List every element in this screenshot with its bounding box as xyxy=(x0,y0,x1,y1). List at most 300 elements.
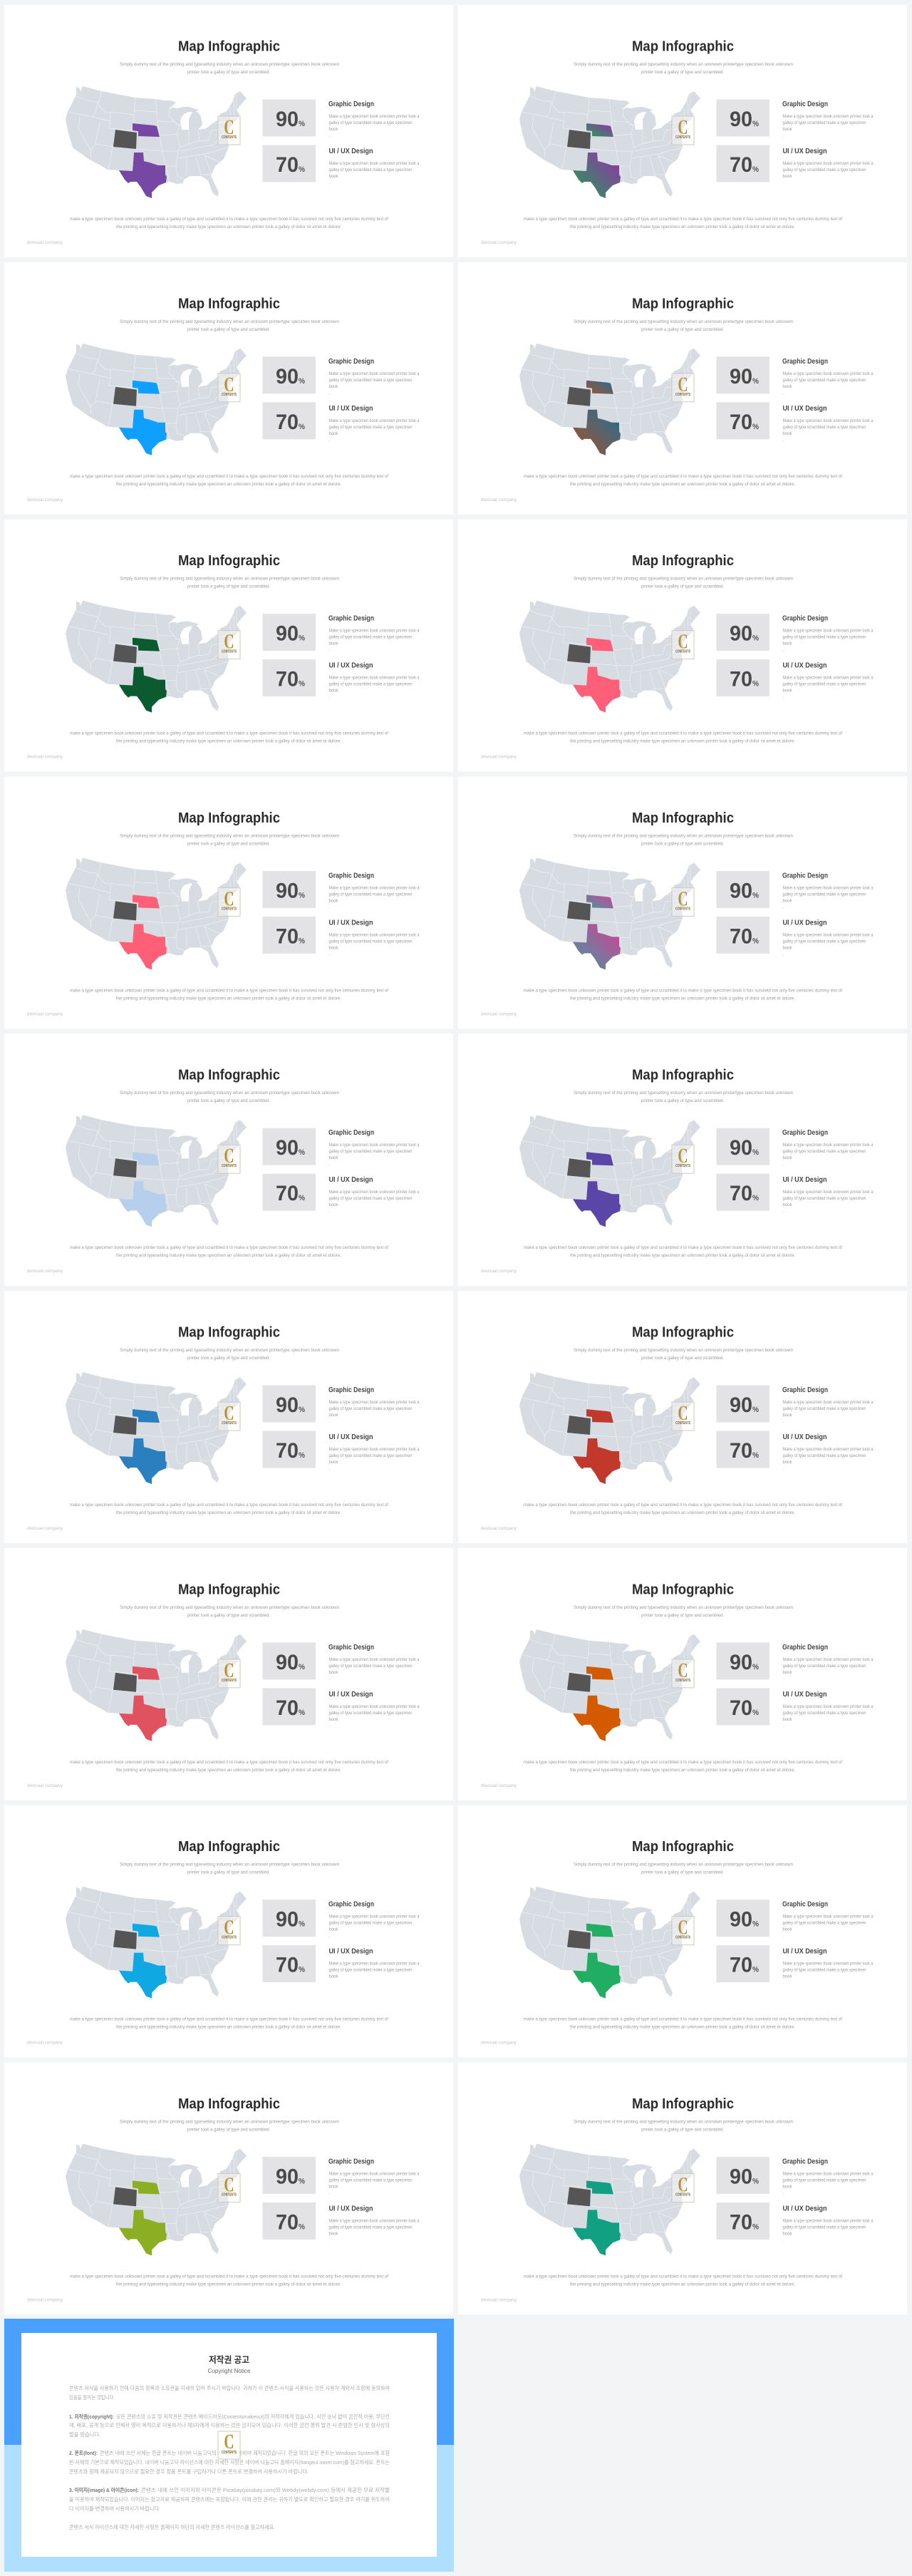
title: Map Infographic xyxy=(632,1068,734,1083)
item: UI / UX Design: galley of type scrambled make a type specimen xyxy=(782,1454,866,1458)
stat box 90%: 90 xyxy=(276,879,299,902)
logo watermark: C xyxy=(678,887,688,910)
stat box 90% xyxy=(717,1642,770,1679)
stat box 70%: 70 xyxy=(730,1696,752,1720)
item: Graphic Design: . xyxy=(329,134,331,138)
section 1 copyright: 1. 저작권(copyright): xyxy=(69,2413,114,2420)
logo watermark: C xyxy=(678,1401,688,1425)
item: Graphic Design: book xyxy=(329,1671,338,1675)
item: UI / UX Design: UI / UX Design xyxy=(329,1433,373,1441)
item: Graphic Design: galley of type scrambled make a type specimen xyxy=(782,2178,866,2183)
intro paragraph xyxy=(69,2384,390,2401)
company name: devisual company xyxy=(27,498,63,503)
logo watermark xyxy=(218,1916,240,1945)
stat box 70% xyxy=(262,145,316,182)
stat box 70%: 70 xyxy=(276,924,299,948)
subtitle text: printer took a galley of type and scrambled. xyxy=(187,842,270,846)
item: Graphic Design: Graphic Design xyxy=(782,100,828,108)
item: UI / UX Design: Make a type specimen book unknown printer took a xyxy=(782,1448,874,1452)
logo watermark xyxy=(672,630,694,659)
item: Graphic Design: Graphic Design xyxy=(782,357,828,366)
item: UI / UX Design: book xyxy=(782,689,792,694)
stat box 70% xyxy=(717,1431,770,1468)
stat box 90%: % xyxy=(752,120,759,128)
item: UI / UX Design: Make a type specimen book unknown printer took a xyxy=(782,2219,874,2223)
item: UI / UX Design: . xyxy=(782,696,784,700)
logo watermark: C xyxy=(678,1916,688,1939)
subtitle text xyxy=(574,1091,793,1103)
US map with highlighted states xyxy=(519,1887,700,1999)
logo watermark xyxy=(672,1401,694,1431)
subtitle text: printer took a galley of type and scrambled. xyxy=(187,328,270,332)
item: UI / UX Design xyxy=(782,404,874,443)
stat box 70%: % xyxy=(752,1709,759,1717)
panel: map slide 11 steel blue xyxy=(4,1291,453,1543)
stat box 70% xyxy=(717,1174,770,1211)
subtitle text: printer took a galley of type and scrambled. xyxy=(187,1356,270,1361)
item: Graphic Design xyxy=(782,1643,874,1681)
footer text: the printing and typesetting industry make type specimen an unknown printer took a galley of dolor sit amet et dolore. xyxy=(570,225,795,230)
section 2 font: 2. 폰트(font): xyxy=(69,2450,98,2456)
item: UI / UX Design: galley of type scrambled make a type specimen xyxy=(329,939,412,944)
stat box 90%: % xyxy=(752,2177,759,2185)
company name: devisual company xyxy=(481,1783,517,1788)
item: Graphic Design: book xyxy=(329,899,338,903)
stat box 70%: % xyxy=(752,2222,759,2231)
stat box 70%: 70 xyxy=(730,668,752,691)
item: UI / UX Design: . xyxy=(782,1982,784,1986)
subtitle text: Simply dummy text of the printing and typesetting industry when an unknown printertype specimen book unknown xyxy=(574,2120,793,2124)
stat box 70%: 70 xyxy=(276,2210,299,2234)
section 1 copyright: 모든 콘텐츠의 소유 및 저작권은 콘텐츠 메이드아웃(Contentsmakeout)의 저작자에게 있습니다. 사전 승낙 없이 금전적 이용, 무단전 xyxy=(116,2413,390,2420)
item: UI / UX Design: . xyxy=(329,2238,331,2242)
item: UI / UX Design: Make a type specimen book unknown printer took a xyxy=(329,419,420,423)
company name: devisual company xyxy=(27,1011,63,1016)
item: Graphic Design xyxy=(782,871,874,910)
subtitle text: Simply dummy text of the printing and typesetting industry when an unknown printertype specimen book unknown xyxy=(574,63,793,67)
footer text: the printing and typesetting industry make type specimen an unknown printer took a galley of dolor sit amet et dolore. xyxy=(116,996,341,1001)
item: Graphic Design: . xyxy=(782,905,784,910)
stat box 70% xyxy=(717,659,770,696)
panel: map slide 17 olive xyxy=(4,2062,453,2314)
item: Graphic Design xyxy=(328,100,420,138)
item: Graphic Design: Make a type specimen book unknown printer took a xyxy=(782,115,874,119)
item: UI / UX Design: Make a type specimen book unknown printer took a xyxy=(329,1705,420,1709)
stat box 90%: % xyxy=(299,377,305,386)
stat box 90% xyxy=(262,2157,316,2194)
item: UI / UX Design: Make a type specimen book unknown printer took a xyxy=(782,933,874,937)
item: UI / UX Design: UI / UX Design xyxy=(329,661,373,670)
item: UI / UX Design: galley of type scrambled make a type specimen xyxy=(782,168,866,172)
item: UI / UX Design: . xyxy=(329,1210,331,1214)
item: Graphic Design: Graphic Design xyxy=(782,1128,828,1137)
item: Graphic Design: Graphic Design xyxy=(782,1643,828,1652)
item: UI / UX Design: . xyxy=(782,952,784,957)
panel: map slide 15 cyan xyxy=(4,1805,453,2058)
stat box 70% xyxy=(717,917,770,954)
section 2 font: 된 서체의 기본으로 제작되었습니다. 네이버 나눔고딕 라이선스에 대한 자세한 사항은 네이버 나눔고딕 홈페이지(hangeul.naver.com)를 참고하세요. 폰트는 xyxy=(69,2458,390,2466)
logo watermark: C xyxy=(224,2430,234,2453)
stat box 70%: 70 xyxy=(276,1182,299,1205)
stat box 90% xyxy=(717,1900,770,1937)
stat box 90%: % xyxy=(752,1148,759,1157)
subtitle text: Simply dummy text of the printing and typesetting industry when an unknown printertype specimen book unknown xyxy=(120,1091,339,1096)
stat box 70% xyxy=(262,1174,316,1211)
item: Graphic Design: Graphic Design xyxy=(328,2157,374,2165)
footer text xyxy=(524,1503,842,1515)
stat box 90% xyxy=(717,2157,770,2194)
panel: map slide 7 coral pink xyxy=(4,776,453,1029)
stat box 70%: 70 xyxy=(276,1439,299,1463)
subtitle text xyxy=(574,1863,793,1875)
item: UI / UX Design xyxy=(329,404,420,443)
footer text: the printing and typesetting industry make type specimen an unknown printer took a galley of dolor sit amet et dolore. xyxy=(570,996,795,1001)
stat box 90%: % xyxy=(299,120,305,128)
item: UI / UX Design: Make a type specimen book unknown printer took a xyxy=(782,419,874,423)
footer text xyxy=(524,1761,842,1773)
section 2 font: 콘텐츠와 함께 제공되지 않으므로 필요한 경우 정품 폰트를 구입하거나 다른 폰트로 변경하여 사용하시기 바랍니다. xyxy=(69,2468,309,2475)
title: Map Infographic xyxy=(632,810,734,826)
item: Graphic Design: . xyxy=(782,1934,784,1939)
item: UI / UX Design: UI / UX Design xyxy=(329,1947,373,1956)
subtitle text xyxy=(574,2120,793,2132)
item: Graphic Design: galley of type scrambled make a type specimen xyxy=(329,1407,412,1411)
company name: devisual company xyxy=(27,755,63,760)
stat box 90% xyxy=(262,871,316,908)
footer text: the printing and typesetting industry make type specimen an unknown printer took a galley of dolor sit amet et dolore. xyxy=(570,1768,795,1773)
company name: devisual company xyxy=(27,1526,63,1531)
company name: devisual company xyxy=(481,240,517,245)
title: Map Infographic xyxy=(632,1324,734,1340)
footer text xyxy=(70,475,388,487)
item: UI / UX Design: book xyxy=(782,175,792,179)
copyright heading: 저작권 공고 xyxy=(209,2354,249,2365)
item: UI / UX Design xyxy=(329,1947,420,1986)
logo watermark: C xyxy=(224,1916,234,1939)
logo watermark xyxy=(218,373,240,402)
item: UI / UX Design: UI / UX Design xyxy=(329,1690,373,1699)
item: UI / UX Design: book xyxy=(782,1203,792,1207)
panel: map slide 14 orange xyxy=(458,1548,907,1800)
stat box 90% xyxy=(262,356,316,393)
subtitle text: Simply dummy text of the printing and typesetting industry when an unknown printertype specimen book unknown xyxy=(574,320,793,324)
logo watermark: C xyxy=(224,1401,234,1425)
stat box 90%: 90 xyxy=(730,879,752,902)
item: UI / UX Design: UI / UX Design xyxy=(782,1433,826,1441)
subtitle text: Simply dummy text of the printing and typesetting industry when an unknown printertype specimen book unknown xyxy=(120,1349,339,1353)
item: UI / UX Design: . xyxy=(329,1467,331,1471)
footer text: the printing and typesetting industry make type specimen an unknown printer took a galley of dolor sit amet et dolore. xyxy=(570,1254,795,1258)
stat box 70%: 70 xyxy=(730,1954,752,1977)
footer text: the printing and typesetting industry make type specimen an unknown printer took a galley of dolor sit amet et dolore. xyxy=(570,2282,795,2287)
item: Graphic Design: galley of type scrambled make a type specimen xyxy=(329,1664,412,1669)
logo watermark xyxy=(218,1659,240,1688)
item: Graphic Design: . xyxy=(782,1420,784,1424)
subtitle text: Simply dummy text of the printing and typesetting industry when an unknown printertype specimen book unknown xyxy=(120,1606,339,1610)
US map with highlighted states xyxy=(519,857,700,969)
US map with highlighted states xyxy=(66,1372,247,1484)
item: UI / UX Design: galley of type scrambled make a type specimen xyxy=(329,426,412,430)
stat box 70%: 70 xyxy=(276,1954,299,1977)
item: UI / UX Design: book xyxy=(329,432,338,436)
subtitle text: printer took a galley of type and scrambled. xyxy=(641,328,724,332)
item: UI / UX Design: book xyxy=(782,1718,792,1722)
subtitle text: Simply dummy text of the printing and typesetting industry when an unknown printertype specimen book unknown xyxy=(120,320,339,324)
stat box 90%: % xyxy=(752,1406,759,1414)
section 3 image and icon: 을 이용하여 제작되었습니다. 이미지는 참고자료 제공하며 콘텐츠에는 포함됩니다. 이에 관한 권리는 귀하가 별도로 확인하고 필요한 경우 여기를 위두하여 xyxy=(69,2495,390,2503)
stat box 90%: 90 xyxy=(276,2165,299,2188)
item: Graphic Design: galley of type scrambled make a type specimen xyxy=(329,636,412,640)
logo watermark xyxy=(218,2173,240,2202)
subtitle text xyxy=(574,320,793,332)
stat box 70%: % xyxy=(299,680,305,689)
stat box 70% xyxy=(717,1945,770,1982)
item: UI / UX Design: galley of type scrambled make a type specimen xyxy=(329,2225,412,2230)
item: UI / UX Design xyxy=(329,918,420,957)
stat box 70%: % xyxy=(752,680,759,689)
section 2 font xyxy=(69,2449,390,2475)
item: UI / UX Design: galley of type scrambled make a type specimen xyxy=(782,1969,866,1973)
logo watermark: CONTENTS xyxy=(222,2193,237,2197)
stat box 70%: % xyxy=(299,1451,305,1460)
panel: map slide 13 rose red xyxy=(4,1548,453,1800)
item: UI / UX Design: book xyxy=(329,946,338,950)
subtitle text: printer took a galley of type and scrambled. xyxy=(641,585,724,589)
item: Graphic Design xyxy=(782,1900,874,1939)
item: UI / UX Design: Make a type specimen book unknown printer took a xyxy=(782,1705,874,1709)
company name: devisual company xyxy=(27,2297,63,2302)
item: UI / UX Design: galley of type scrambled make a type specimen xyxy=(782,683,866,687)
item: UI / UX Design: galley of type scrambled make a type specimen xyxy=(329,1197,412,1201)
company name: devisual company xyxy=(481,2041,517,2046)
item: Graphic Design xyxy=(782,1386,874,1424)
logo watermark xyxy=(672,1916,694,1945)
panel: map slide 2 purple-green gradient xyxy=(458,5,907,257)
item: UI / UX Design: UI / UX Design xyxy=(329,2204,373,2212)
logo watermark: CONTENTS xyxy=(222,1679,237,1683)
footer text xyxy=(70,1503,388,1515)
item: UI / UX Design: Make a type specimen book unknown printer took a xyxy=(329,1190,420,1195)
stat box 70%: 70 xyxy=(730,2210,752,2234)
item: UI / UX Design: Make a type specimen book unknown printer took a xyxy=(782,1962,874,1967)
item: Graphic Design: book xyxy=(782,1928,792,1932)
item: UI / UX Design: UI / UX Design xyxy=(782,147,826,155)
logo watermark: C xyxy=(224,1659,234,1682)
logo watermark xyxy=(672,2173,694,2202)
item: Graphic Design: . xyxy=(782,649,784,653)
US map with highlighted states xyxy=(66,1629,247,1741)
item: Graphic Design: galley of type scrambled make a type specimen xyxy=(329,121,412,125)
subtitle text: printer took a galley of type and scrambled. xyxy=(187,71,270,75)
footer text xyxy=(70,217,388,230)
item: Graphic Design: galley of type scrambled make a type specimen xyxy=(782,1150,866,1154)
company name: devisual company xyxy=(481,755,517,760)
footer text: the printing and typesetting industry make type specimen an unknown printer took a galley of dolor sit amet et dolore. xyxy=(116,225,341,230)
subtitle text: Simply dummy text of the printing and typesetting industry when an unknown printertype specimen book unknown xyxy=(574,577,793,582)
logo watermark: C xyxy=(224,115,234,139)
title: Map Infographic xyxy=(632,2096,734,2112)
title: Map Infographic xyxy=(178,1324,280,1340)
section 3 image and icon: 다 이미지를 변경하여 사용하시기 바랍니다. xyxy=(69,2505,160,2512)
company name: devisual company xyxy=(481,1526,517,1531)
subtitle text: Simply dummy text of the printing and typesetting industry when an unknown printertype specimen book unknown xyxy=(120,2120,339,2124)
item: Graphic Design: galley of type scrambled make a type specimen xyxy=(782,1664,866,1669)
footer text: make a type specimen book unknown printer took a galley of type and scrambled it to make a type specimen book it has survived not only five centuries dummy text of xyxy=(524,2274,842,2279)
US map with highlighted states xyxy=(66,601,247,713)
panel: map slide 3 blue xyxy=(4,262,453,515)
stat box 90%: % xyxy=(752,891,759,900)
item: Graphic Design: galley of type scrambled make a type specimen xyxy=(782,636,866,640)
stat box 70%: 70 xyxy=(730,1182,752,1205)
stat box 90%: 90 xyxy=(730,365,752,388)
item: Graphic Design xyxy=(328,1386,420,1424)
item: Graphic Design: Graphic Design xyxy=(328,100,374,108)
stat box 90%: % xyxy=(752,377,759,386)
item: UI / UX Design xyxy=(329,147,420,185)
subtitle text xyxy=(120,1091,339,1103)
logo watermark: CONTENTS xyxy=(222,2451,237,2455)
item: Graphic Design: book xyxy=(329,128,338,132)
stat box 70%: % xyxy=(299,937,305,945)
stat box 90% xyxy=(717,100,770,137)
stat box 90% xyxy=(262,1642,316,1679)
closing line: 콘텐츠 서식 라이선스에 대한 자세한 사항은 홈페이지 하단의 자세한 콘텐츠 라이선스를 참고하세요. xyxy=(69,2523,275,2530)
item: UI / UX Design xyxy=(329,1433,420,1471)
footer text: make a type specimen book unknown printer took a galley of type and scrambled it to make a type specimen book it has survived not only five centuries dummy text of xyxy=(70,2018,388,2022)
panel: map slide 1 purple xyxy=(4,5,453,257)
item: Graphic Design: galley of type scrambled make a type specimen xyxy=(782,1407,866,1411)
item: UI / UX Design: UI / UX Design xyxy=(329,404,373,413)
subtitle text: Simply dummy text of the printing and typesetting industry when an unknown printertype specimen book unknown xyxy=(574,1091,793,1096)
item: UI / UX Design: galley of type scrambled make a type specimen xyxy=(329,683,412,687)
US map with highlighted states xyxy=(519,1372,700,1484)
subtitle text: printer took a galley of type and scrambled. xyxy=(641,842,724,846)
subtitle text: printer took a galley of type and scrambled. xyxy=(641,1099,724,1103)
item: Graphic Design: book xyxy=(329,642,338,646)
item: Graphic Design: Graphic Design xyxy=(782,2157,828,2165)
company name: devisual company xyxy=(481,1011,517,1016)
item: Graphic Design: Make a type specimen book unknown printer took a xyxy=(782,1401,874,1405)
subtitle text: printer took a galley of type and scrambled. xyxy=(187,1871,270,1875)
footer text xyxy=(524,732,842,744)
title: Map Infographic xyxy=(632,553,734,569)
company name: devisual company xyxy=(27,2041,63,2046)
title: Map Infographic xyxy=(632,1582,734,1597)
logo watermark xyxy=(218,1401,240,1431)
subtitle text: Simply dummy text of the printing and typesetting industry when an unknown printertype specimen book unknown xyxy=(120,577,339,582)
item: Graphic Design: Make a type specimen book unknown printer took a xyxy=(329,2172,420,2176)
title: Map Infographic xyxy=(178,1582,280,1597)
logo watermark xyxy=(672,1659,694,1688)
logo watermark xyxy=(672,115,694,145)
item: Graphic Design: book xyxy=(329,1156,338,1160)
company name: devisual company xyxy=(481,498,517,503)
section 3 image and icon: 콘텐츠 내에 쓰인 이미지와 아이콘은 Pixabay(pixabay.com)와 Webdy(webdy.com) 등에서 제공한 무료 저작물 xyxy=(141,2486,390,2493)
logo watermark: CONTENTS xyxy=(675,1164,691,1168)
item: Graphic Design: Make a type specimen book unknown printer took a xyxy=(329,1915,420,1920)
item: UI / UX Design: galley of type scrambled make a type specimen xyxy=(782,1197,866,1201)
item: Graphic Design: galley of type scrambled make a type specimen xyxy=(782,378,866,383)
stat box 70%: 70 xyxy=(276,668,299,691)
item: Graphic Design xyxy=(782,357,874,396)
item: Graphic Design: . xyxy=(782,1163,784,1167)
US map with highlighted states xyxy=(66,344,247,455)
footer text xyxy=(524,475,842,487)
item: Graphic Design: galley of type scrambled make a type specimen xyxy=(329,892,412,897)
item: UI / UX Design: book xyxy=(329,175,338,179)
section 3 image and icon: 3. 이미지(image) & 아이콘(icon): xyxy=(69,2486,139,2493)
subtitle text xyxy=(574,63,793,75)
section 3 image and icon xyxy=(69,2486,390,2512)
stat box 70%: % xyxy=(299,423,305,431)
panel: map slide 12 brick red xyxy=(458,1291,907,1543)
subtitle text: printer took a galley of type and scrambled. xyxy=(641,1871,724,1875)
stat box 90%: % xyxy=(299,2177,305,2185)
item: Graphic Design: Make a type specimen book unknown printer took a xyxy=(329,886,420,890)
stat box 90%: 90 xyxy=(730,1136,752,1160)
subtitle text xyxy=(120,2120,339,2132)
footer text: make a type specimen book unknown printer took a galley of type and scrambled it to make a type specimen book it has survived not only five centuries dummy text of xyxy=(70,732,388,736)
item: UI / UX Design: . xyxy=(329,438,331,443)
footer text: make a type specimen book unknown printer took a galley of type and scrambled it to make a type specimen book it has survived not only five centuries dummy text of xyxy=(70,989,388,993)
stat box 90%: % xyxy=(299,1148,305,1157)
subtitle text xyxy=(120,1349,339,1361)
item: UI / UX Design: . xyxy=(329,696,331,700)
item: Graphic Design xyxy=(328,1900,420,1939)
logo watermark: CONTENTS xyxy=(222,650,237,654)
item: UI / UX Design: Make a type specimen book unknown printer took a xyxy=(329,1448,420,1452)
item: Graphic Design: book xyxy=(782,1156,792,1160)
logo watermark: CONTENTS xyxy=(675,907,691,911)
stat box 70%: % xyxy=(752,1966,759,1974)
item: UI / UX Design: book xyxy=(782,432,792,436)
stat box 90%: 90 xyxy=(730,1908,752,1932)
stat box 70% xyxy=(262,1431,316,1468)
item: Graphic Design xyxy=(328,614,420,653)
logo watermark: C xyxy=(678,1659,688,1682)
item: UI / UX Design: . xyxy=(329,181,331,185)
copyright subheading: Copyright Notice xyxy=(208,2368,251,2374)
subtitle text xyxy=(120,1606,339,1618)
title: Map Infographic xyxy=(632,38,734,54)
logo watermark: C xyxy=(224,373,234,396)
logo watermark: CONTENTS xyxy=(222,1936,237,1940)
item: UI / UX Design: book xyxy=(329,1975,338,1979)
item: Graphic Design xyxy=(328,357,420,396)
item: UI / UX Design: galley of type scrambled make a type specimen xyxy=(329,1454,412,1458)
title: Map Infographic xyxy=(178,1068,280,1083)
subtitle text: printer took a galley of type and scrambled. xyxy=(641,71,724,75)
panel: map slide 10 indigo xyxy=(458,1034,907,1286)
item: UI / UX Design xyxy=(782,1947,874,1986)
panel: map slide 18 teal xyxy=(458,2062,907,2314)
footer text xyxy=(70,989,388,1001)
logo watermark: CONTENTS xyxy=(222,907,237,911)
item: UI / UX Design: galley of type scrambled make a type specimen xyxy=(329,168,412,172)
item: UI / UX Design xyxy=(329,1175,420,1214)
item: Graphic Design: Make a type specimen book unknown printer took a xyxy=(782,1143,874,1148)
item: UI / UX Design xyxy=(782,1175,874,1214)
item: UI / UX Design xyxy=(782,1433,874,1471)
stat box 90%: 90 xyxy=(276,1136,299,1160)
title: Map Infographic xyxy=(178,296,280,311)
item: UI / UX Design xyxy=(782,918,874,957)
item: Graphic Design: Make a type specimen book unknown printer took a xyxy=(782,2172,874,2176)
item: UI / UX Design: book xyxy=(329,689,338,694)
stat box 70%: % xyxy=(752,1451,759,1460)
stat box 70% xyxy=(262,659,316,696)
item: Graphic Design: galley of type scrambled make a type specimen xyxy=(329,1150,412,1154)
